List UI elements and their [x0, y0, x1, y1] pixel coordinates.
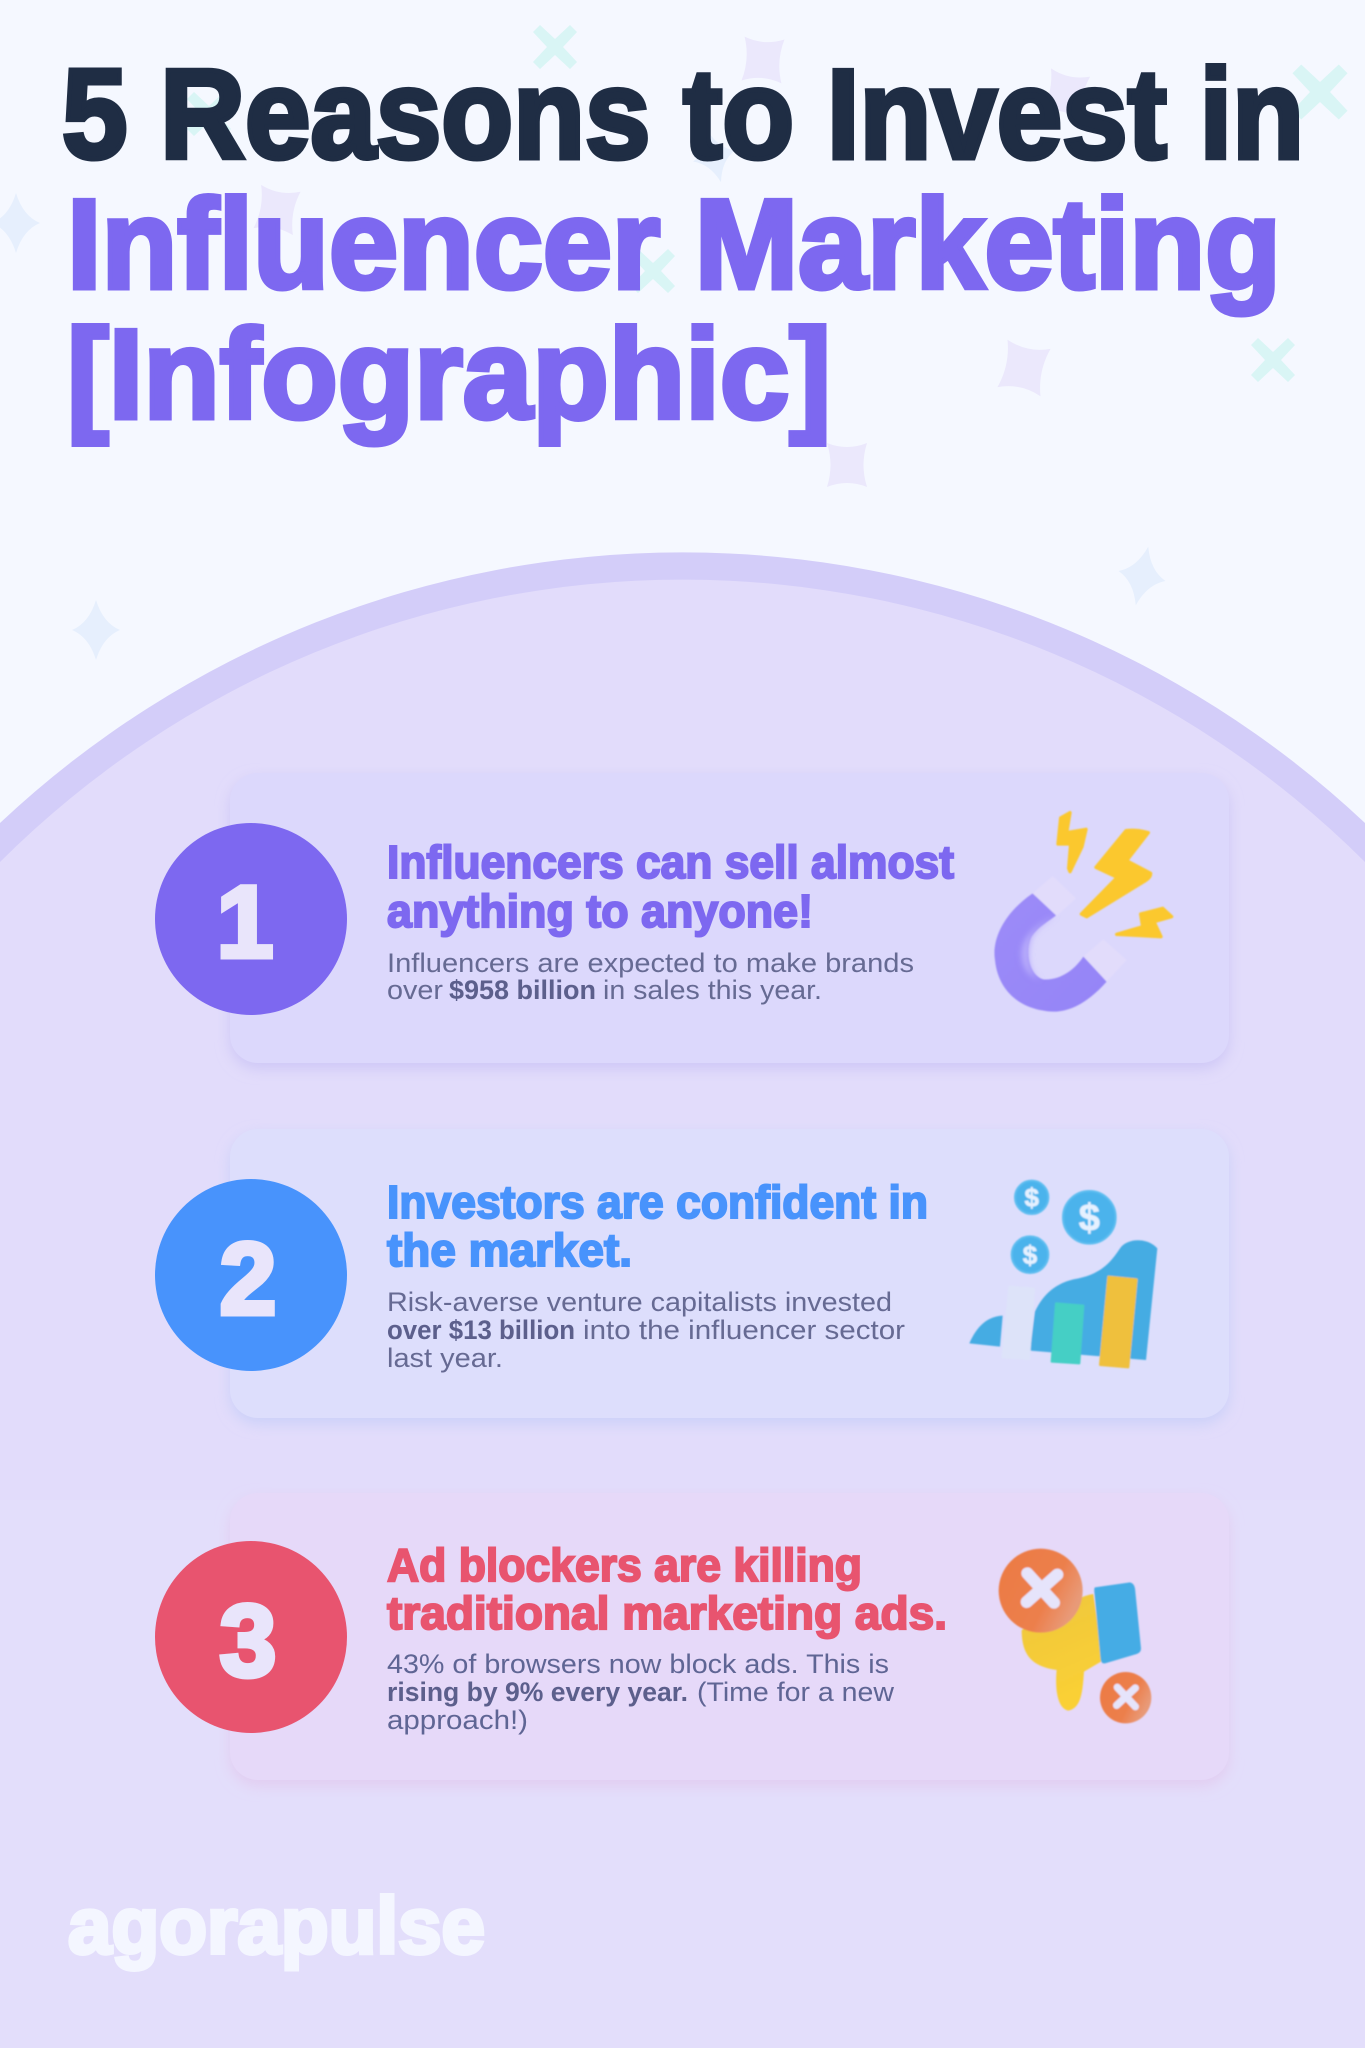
body text 3: approach!)	[387, 1705, 528, 1735]
number badge 1	[155, 823, 347, 1015]
body text 2: Risk-averse venture capitalists invested	[387, 1287, 892, 1317]
card 1	[230, 773, 1229, 1063]
body text 1: $958 billion	[449, 975, 596, 1005]
logo: agorapulse: agorapulse	[68, 1881, 485, 1970]
icon: growth chart with coins	[969, 1181, 1157, 1367]
body text 1	[387, 948, 914, 1005]
body text 1: Influencers are expected to make brands	[387, 948, 914, 978]
number badge 3	[155, 1541, 347, 1733]
heading 1: anything to anyone!	[387, 885, 813, 937]
title	[62, 43, 1304, 445]
background arc	[0, 552, 1365, 2048]
icon: magnet with lightning bolts	[994, 813, 1172, 1012]
decorative confetti	[0, 25, 1348, 660]
card 2	[230, 1129, 1229, 1418]
body text 2: last year.	[387, 1343, 503, 1373]
body text 3	[387, 1649, 895, 1735]
body text 2: into the influencer sector	[583, 1315, 905, 1345]
heading 2: Investors are confident in	[387, 1176, 928, 1228]
panel: reason 2	[155, 1129, 1229, 1418]
heading 3: traditional marketing ads.	[387, 1587, 947, 1639]
heading 1: Influencers can sell almost	[387, 836, 954, 888]
body text 3: (Time for a new	[697, 1677, 895, 1707]
title: [Infographic]	[67, 303, 831, 445]
heading 3: Ad blockers are killing	[387, 1539, 862, 1591]
body text 1: over	[387, 975, 443, 1005]
body text 3: 43% of browsers now block ads. This is	[387, 1649, 889, 1679]
icon: thumbs down with X marks	[999, 1549, 1151, 1723]
body text 1: in sales this year.	[603, 975, 822, 1005]
heading 2	[387, 1176, 928, 1276]
number badge 1: 1	[217, 865, 273, 979]
heading 1	[387, 836, 954, 937]
number badge 3: 3	[220, 1584, 276, 1698]
card 3	[230, 1493, 1229, 1780]
title: Influencer Marketing	[67, 173, 1281, 315]
number badge 2	[155, 1179, 347, 1371]
number badge 2: 2	[220, 1222, 276, 1336]
icon: growth chart with coins: $	[1023, 1240, 1038, 1270]
title: 5 Reasons to Invest in	[62, 43, 1304, 185]
heading 2: the market.	[387, 1224, 632, 1276]
icon: growth chart with coins: $	[1024, 1183, 1039, 1213]
panel: reason 3	[155, 1493, 1229, 1780]
heading 3	[387, 1539, 947, 1639]
panel: reason 1	[155, 773, 1229, 1063]
body text 3: rising by 9% every year.	[387, 1677, 688, 1707]
icon: growth chart with coins: $	[1079, 1198, 1100, 1240]
body text 2: over $13 billion	[387, 1315, 575, 1345]
body text 2	[387, 1287, 905, 1373]
